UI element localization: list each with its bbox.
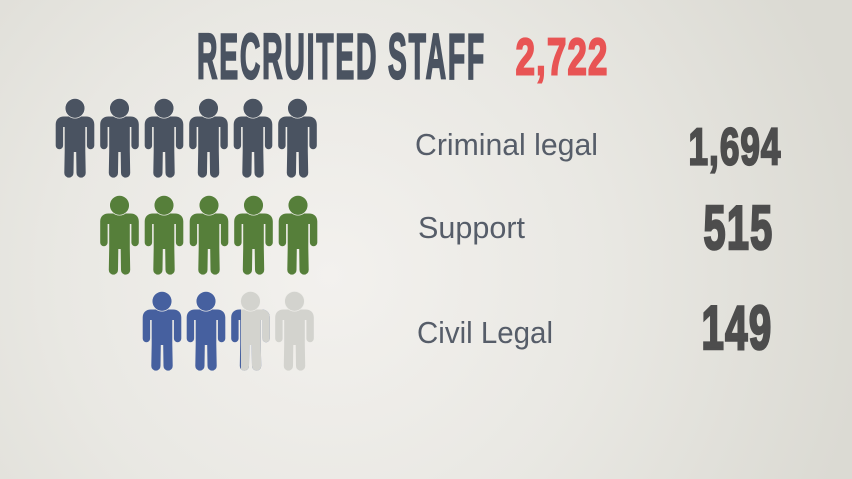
person icon: blue, partly covered <box>231 291 270 371</box>
label: support: Support <box>418 210 525 245</box>
row: support icons <box>100 195 317 275</box>
person icon <box>190 195 228 275</box>
row: civil legal icons <box>143 291 314 371</box>
person icon <box>278 98 317 178</box>
person icon <box>279 195 317 275</box>
person icon: grey <box>275 291 314 371</box>
person icon <box>145 195 183 275</box>
text: RECRUITED STAFF <box>197 20 486 92</box>
person icon <box>145 98 183 178</box>
person icon <box>100 195 139 275</box>
value: criminal legal: 1,694 <box>688 118 782 176</box>
person icon: grey, partly filled <box>241 292 270 370</box>
total figure: 2,722 <box>516 28 608 86</box>
value: civil legal: 149 <box>702 294 772 363</box>
person icon <box>56 98 94 178</box>
label: criminal legal: Criminal legal <box>415 127 598 162</box>
person icon <box>234 195 273 275</box>
value: support: 515 <box>704 194 774 263</box>
person icon: blue <box>187 291 225 371</box>
person icon: blue <box>143 291 181 371</box>
row: criminal legal icons <box>56 98 317 178</box>
person icon <box>234 98 272 178</box>
person icon <box>100 98 139 178</box>
person icon <box>189 98 228 178</box>
label: civil legal: Civil Legal <box>417 315 553 350</box>
